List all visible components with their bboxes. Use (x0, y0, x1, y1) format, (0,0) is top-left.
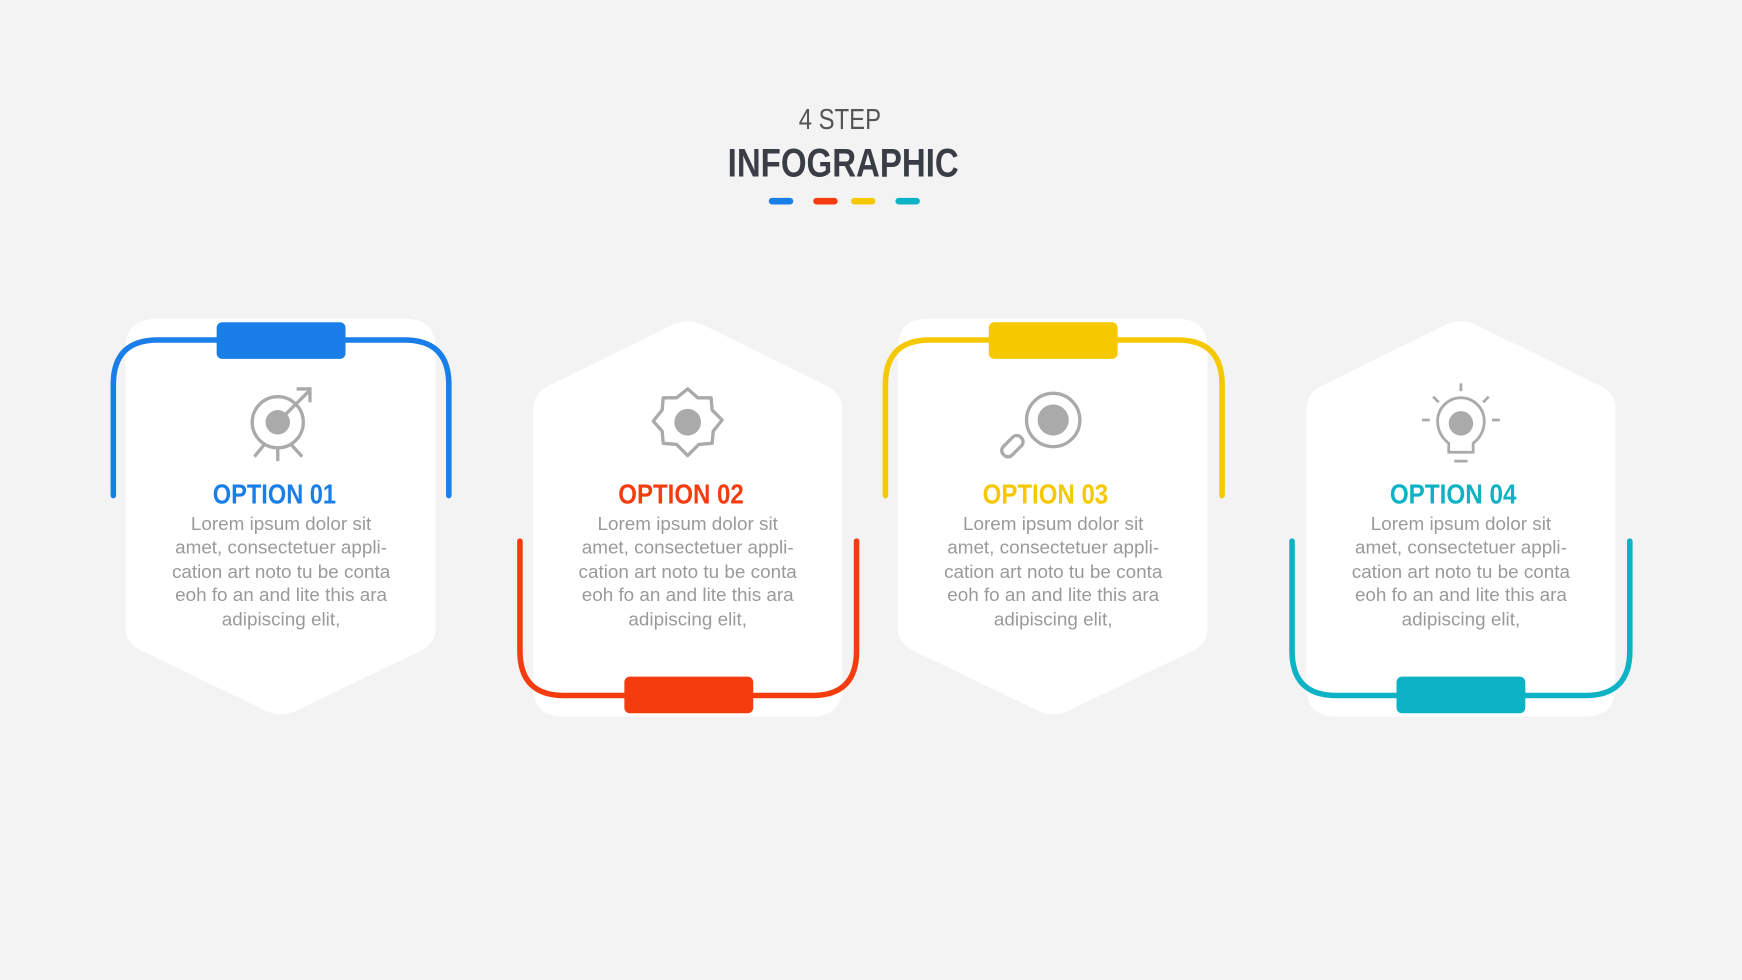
heading: OPTION 02 (618, 478, 744, 509)
text block: adipiscing elit, (628, 610, 747, 631)
text block: cation art noto tu be conta (172, 562, 391, 583)
text block: amet, consectetuer appli- (175, 537, 387, 558)
title: 4 STEP (799, 104, 881, 136)
tab (624, 677, 753, 713)
text block: amet, consectetuer appli- (947, 537, 1159, 558)
card shape (898, 319, 1208, 714)
text block: Lorem ipsum dolor sit (191, 514, 372, 535)
text block: adipiscing elit, (1402, 610, 1520, 631)
title: INFOGRAPHIC (728, 142, 959, 186)
title (728, 104, 959, 186)
icon: gear (653, 389, 722, 456)
bracket (113, 340, 449, 496)
text block: Lorem ipsum dolor sit (1371, 514, 1552, 535)
card shape (533, 321, 842, 717)
color dashes (772, 198, 917, 204)
tab (217, 322, 346, 359)
text block: adipiscing elit, (222, 610, 340, 631)
heading: OPTION 04 (1390, 478, 1517, 509)
tab (1396, 677, 1525, 713)
text block: amet, consectetuer appli- (582, 537, 794, 558)
bracket (1292, 541, 1630, 696)
card shape (1306, 321, 1615, 717)
heading: OPTION 03 (983, 478, 1108, 509)
text block: Lorem ipsum dolor sit (963, 514, 1144, 535)
text block: eoh fo an and lite this ara (1355, 585, 1567, 606)
text block: adipiscing elit, (994, 610, 1112, 631)
icon: magnifier (999, 393, 1080, 459)
bracket (520, 541, 857, 696)
text block: cation art noto tu be conta (1352, 562, 1571, 583)
panel: option 03 (885, 319, 1222, 714)
tab (989, 322, 1118, 359)
panel: option 01 (113, 319, 449, 714)
text block: eoh fo an and lite this ara (947, 585, 1160, 606)
icon: light bulb (1422, 383, 1500, 461)
bracket (885, 340, 1222, 496)
text block: eoh fo an and lite this ara (175, 585, 388, 606)
card shape (126, 319, 435, 714)
text block: Lorem ipsum dolor sit (597, 514, 779, 535)
panel: option 04 (1292, 321, 1630, 717)
panel: option 02 (520, 321, 857, 717)
text block: amet, consectetuer appli- (1355, 537, 1567, 558)
text block: cation art noto tu be conta (944, 562, 1163, 583)
icon: target (252, 389, 310, 461)
text block: cation art noto tu be conta (579, 562, 797, 583)
heading: OPTION 01 (213, 478, 336, 509)
text block: eoh fo an and lite this ara (582, 585, 794, 606)
